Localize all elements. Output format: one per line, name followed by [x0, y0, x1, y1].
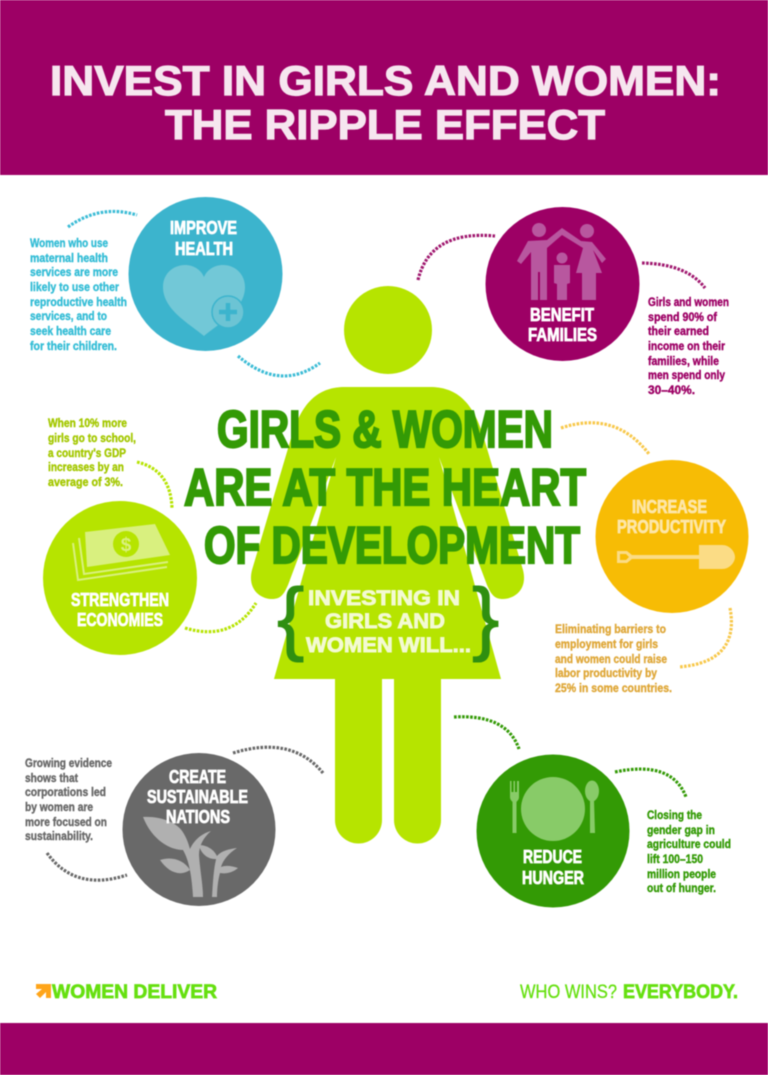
text: families fact: [648, 295, 729, 397]
icon: shovel: [617, 545, 735, 569]
text: productivity fact: labor productivity by: [555, 666, 657, 680]
panel: improve health: HEALTH: [175, 239, 233, 259]
panel: increase productivity: PRODUCTIVITY: [617, 517, 726, 537]
text: sustainability fact: corporations led: [25, 785, 106, 799]
icon: stack of money: $: [121, 535, 132, 556]
text: health fact: [30, 236, 127, 353]
investing text with braces: WOMEN WILL...: [306, 634, 471, 657]
header band with title: [0, 0, 768, 175]
panel: benefit families: FAMILIES: [528, 325, 597, 345]
text: sustainability fact: more focused on: [25, 815, 107, 829]
text: health fact: seek health care: [30, 324, 111, 338]
investing text with braces: [277, 572, 499, 663]
header band with title: INVEST IN GIRLS AND WOMEN:: [50, 57, 721, 104]
text: sustainability fact: [25, 756, 112, 843]
icon: heart with plus: [163, 265, 245, 336]
text: productivity fact: employment for girls: [555, 637, 658, 651]
panel: increase productivity: [555, 423, 748, 695]
text: hunger fact: Closing the: [647, 808, 702, 822]
text: hunger fact: [647, 808, 731, 895]
text: health fact: likely to use other: [30, 280, 119, 294]
panel: create sustainable nations: CREATE: [169, 767, 226, 787]
panel: reduce hunger: [454, 717, 731, 908]
text: economies fact: a country's GDP: [48, 446, 126, 460]
panel: reduce hunger: REDUCE: [523, 847, 582, 867]
text: hunger fact: out of hunger.: [647, 881, 716, 895]
tagline: EVERYBODY.: [623, 982, 738, 1003]
text: economies fact: [48, 416, 136, 489]
text: sustainability fact: shows that: [25, 771, 78, 785]
icon: plate with fork and spoon: [510, 777, 599, 841]
investing text with braces: INVESTING IN: [308, 587, 460, 610]
footer band: [0, 1023, 768, 1075]
icon: plant: [143, 817, 238, 897]
panel: improve health: IMPROVE: [170, 218, 237, 238]
text: families fact: spend 90% of: [648, 310, 718, 324]
text: productivity fact: 25% in some countries.: [555, 681, 672, 695]
investing text with braces: }: [472, 572, 499, 663]
text: economies fact: girls go to school,: [48, 431, 136, 445]
text: families fact: Girls and women: [648, 295, 729, 309]
text: productivity fact: Eliminating barriers to: [555, 622, 666, 636]
text: health fact: Women who use: [30, 236, 108, 250]
header band with title: THE RIPPLE EFFECT: [165, 101, 605, 148]
text: economies fact: average of 3%.: [48, 475, 123, 489]
icon: family under a roof: [517, 223, 606, 300]
central figure of a woman: [251, 286, 524, 844]
text: hunger fact: million people: [647, 867, 716, 881]
panel: strengthen economies: ECONOMIES: [77, 610, 163, 630]
central heading: [184, 401, 586, 575]
text: sustainability fact: Growing evidence: [25, 756, 112, 770]
text: productivity fact: and women could raise: [555, 652, 667, 666]
investing text with braces: {: [277, 572, 304, 663]
text: hunger fact: gender gap in: [647, 823, 715, 837]
text: economies fact: increases by an: [48, 460, 124, 474]
central heading: GIRLS & WOMEN: [217, 401, 553, 459]
text: families fact: 30–40%.: [648, 383, 695, 397]
panel: create sustainable nations: [25, 747, 323, 906]
text: health fact: for their children.: [30, 339, 117, 353]
text: families fact: families, while: [648, 354, 719, 368]
text: families fact: their earned: [648, 324, 709, 338]
text: hunger fact: agriculture could: [647, 837, 731, 851]
panel: benefit families: [418, 207, 729, 397]
text: sustainability fact: sustainability.: [25, 829, 93, 843]
icon: stack of money: [73, 524, 170, 580]
panel: create sustainable nations: SUSTAINABLE: [147, 787, 248, 807]
central heading: OF DEVELOPMENT: [204, 517, 580, 575]
panel: reduce hunger: HUNGER: [522, 868, 584, 888]
text: families fact: men spend only: [648, 368, 725, 382]
tagline: WHO WINS?: [520, 982, 617, 1003]
text: health fact: reproductive health: [30, 295, 127, 309]
text: sustainability fact: by women are: [25, 800, 93, 814]
tagline: [520, 982, 738, 1003]
text: health fact: services are more: [30, 265, 118, 279]
text: productivity fact: [555, 622, 672, 695]
panel: benefit families: BENEFIT: [530, 305, 594, 325]
panel: increase productivity: INCREASE: [632, 497, 707, 517]
text: hunger fact: lift 100–150: [647, 852, 703, 866]
logo: women deliver: WOMEN DELIVER: [52, 982, 217, 1003]
panel: create sustainable nations: NATIONS: [166, 807, 230, 827]
text: economies fact: When 10% more: [48, 416, 127, 430]
text: health fact: maternal health: [30, 251, 108, 265]
investing text with braces: GIRLS AND: [325, 610, 445, 633]
text: health fact: services, and to: [30, 309, 107, 323]
panel: strengthen economies: [43, 416, 256, 655]
panel: strengthen economies: STRENGTHEN: [71, 590, 169, 610]
text: families fact: income on their: [648, 339, 725, 353]
panel: improve health: [30, 197, 320, 376]
central heading: ARE AT THE HEART: [184, 459, 586, 517]
